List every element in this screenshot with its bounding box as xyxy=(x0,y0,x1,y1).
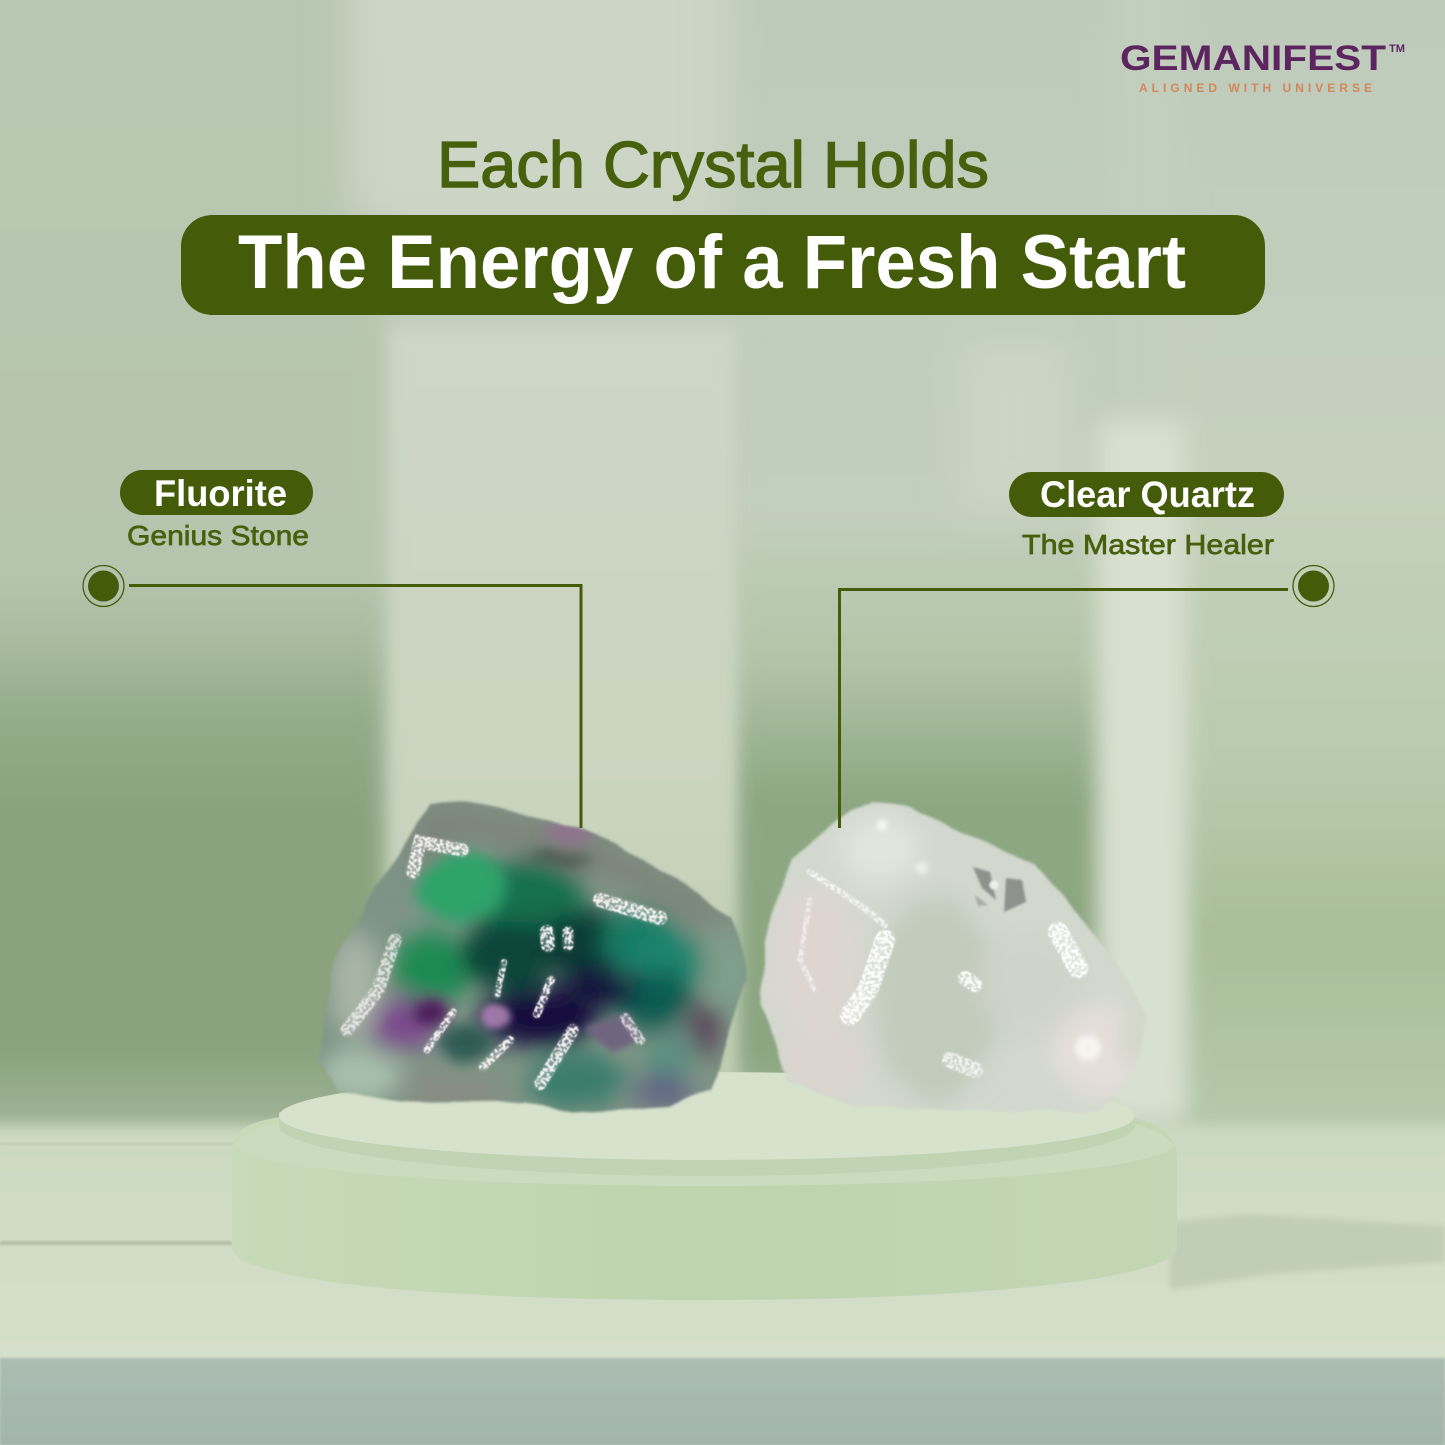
logo: Gemanifest xyxy=(1120,39,1405,95)
logo: Gemanifest: GEMANIFEST xyxy=(1120,39,1386,78)
fluorite leader line xyxy=(129,586,581,828)
fluorite label pill: Fluorite xyxy=(154,473,287,514)
callout: fluorite xyxy=(83,470,581,828)
title xyxy=(181,128,1265,315)
fluorite subtitle: Genius Stone xyxy=(127,520,309,551)
quartz marker xyxy=(1293,566,1334,606)
heading line one: Each Crystal Holds xyxy=(437,128,989,201)
podium: two stacked round discs xyxy=(232,1072,1177,1300)
fluorite label pill xyxy=(120,470,313,515)
callout: clear quartz xyxy=(840,472,1334,828)
quartz label pill: Clear Quartz xyxy=(1040,474,1255,515)
quartz dark inclusion xyxy=(973,867,1026,912)
logo: Gemanifest: ALIGNED WITH UNIVERSE xyxy=(1139,81,1372,95)
quartz sparkles xyxy=(800,872,1078,1070)
fluorite marker xyxy=(83,566,124,606)
crystal: clear quartz xyxy=(758,800,1144,1112)
quartz subtitle: The Master Healer xyxy=(1022,529,1274,560)
logo: Gemanifest: TM xyxy=(1389,43,1405,55)
quartz highlights xyxy=(877,820,1101,1061)
crystal: fluorite xyxy=(319,800,747,1114)
fluorite sparkles xyxy=(347,842,660,1084)
heading pill: The Energy of a Fresh Start xyxy=(238,220,1186,305)
quartz leader line xyxy=(840,590,1288,828)
